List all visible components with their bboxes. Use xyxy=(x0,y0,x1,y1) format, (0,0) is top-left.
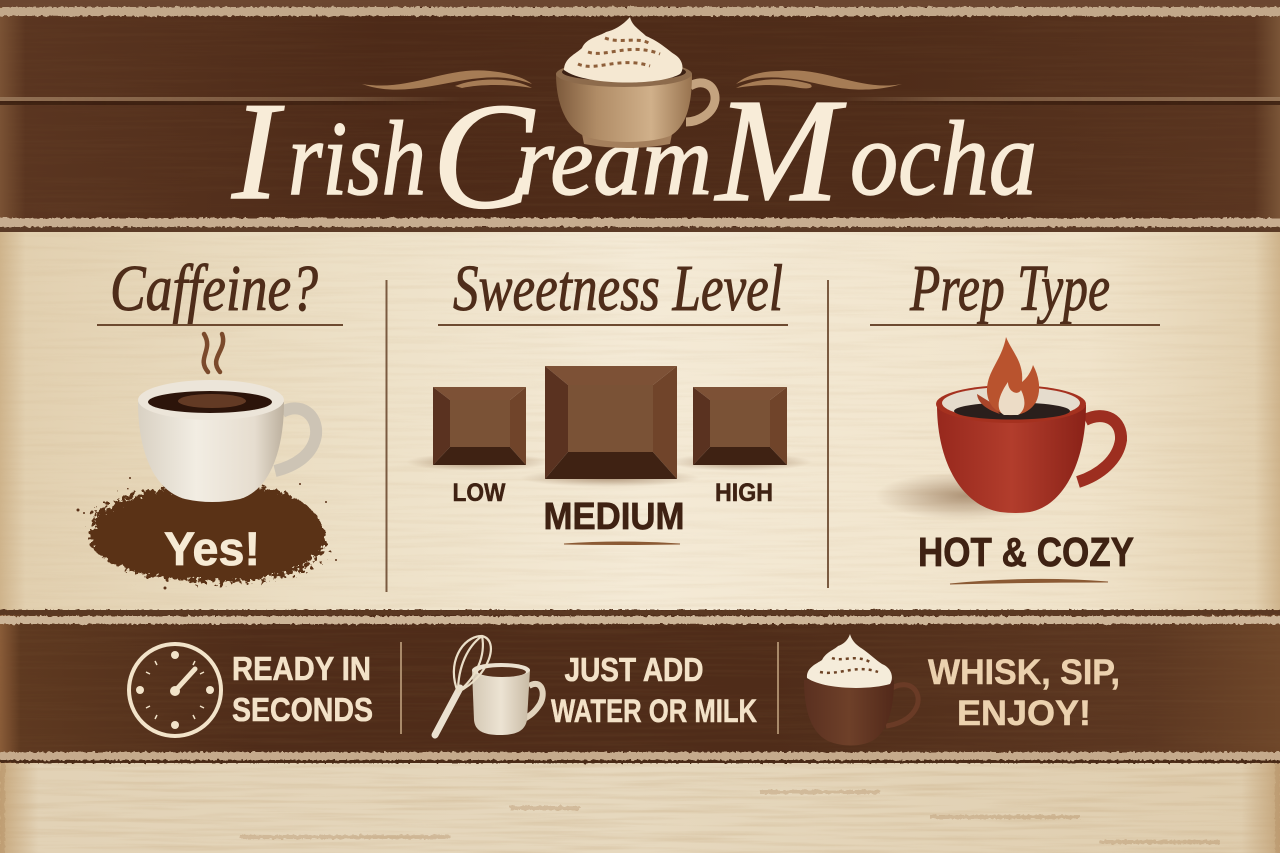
bottom light wood plank xyxy=(0,763,1280,853)
step: just add water or milk xyxy=(435,636,757,735)
top wood banner xyxy=(0,0,1280,232)
title flourish right xyxy=(736,70,902,90)
rust streaks on bottom plank xyxy=(0,763,1280,853)
title xyxy=(231,69,1037,240)
label: high: HIGH xyxy=(715,479,773,507)
title: C xyxy=(432,72,535,240)
icon: whipped cream cup xyxy=(556,17,715,148)
panel: caffeine xyxy=(76,252,343,590)
column divider xyxy=(386,280,388,592)
heading: caffeine: Caffeine? xyxy=(110,252,318,325)
label: medium: MEDIUM xyxy=(544,496,684,538)
icon: white coffee cup xyxy=(138,380,316,502)
step: ready in seconds: SECONDS xyxy=(232,691,373,728)
panel: sweetness level xyxy=(406,252,812,544)
column divider xyxy=(827,280,829,588)
title: ream xyxy=(516,105,712,216)
cream info panel background xyxy=(0,232,1280,610)
step: whisk sip enjoy: ENJOY! xyxy=(957,694,1091,733)
icon: clock xyxy=(129,644,221,736)
label: hot and cozy: HOT & COZY xyxy=(918,529,1134,575)
icon: high chocolate xyxy=(693,387,787,465)
band divider xyxy=(400,642,402,734)
title: M xyxy=(714,69,847,233)
heading: prep type: Prep Type xyxy=(909,252,1110,325)
heading: sweetness level: Sweetness Level xyxy=(453,252,783,325)
title: rish xyxy=(288,100,426,217)
icon: red mug with flame xyxy=(936,337,1121,513)
icon: medium chocolate xyxy=(545,366,677,479)
panel: prep type xyxy=(870,252,1160,584)
title: I xyxy=(231,74,285,229)
icon: steam xyxy=(204,334,223,372)
lower wood band xyxy=(0,610,1280,763)
text: just add water or milk: JUST ADD xyxy=(564,651,704,688)
icon: low chocolate xyxy=(433,387,526,465)
band divider xyxy=(777,642,779,734)
coffee grounds splash xyxy=(76,477,337,590)
text: ready in seconds: READY IN xyxy=(232,650,371,687)
step: ready in seconds xyxy=(129,644,373,736)
label: low: LOW xyxy=(452,479,506,507)
label: yes: Yes! xyxy=(164,522,260,575)
icon: mug with whipped cream xyxy=(804,634,918,746)
icon: whisk and cup xyxy=(435,636,543,735)
step: just add water or milk: WATER OR MILK xyxy=(551,693,757,729)
title flourish left xyxy=(362,70,532,90)
text: whisk sip enjoy: WHISK, SIP, xyxy=(928,653,1120,692)
title: ocha xyxy=(850,100,1037,217)
step: whisk sip enjoy xyxy=(804,634,1120,746)
